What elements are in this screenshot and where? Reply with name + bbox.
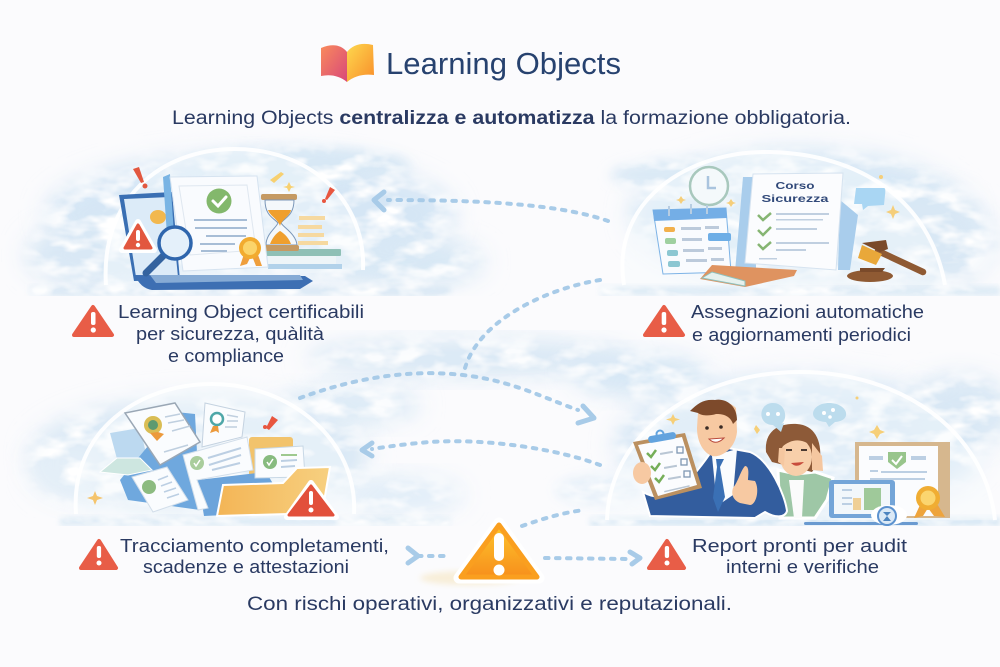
icon: red exclamation left (133, 167, 148, 188)
icon: teal pale document (100, 458, 152, 475)
text block: Learning Object certificabili (118, 301, 364, 322)
icon: document teal seal (202, 403, 245, 447)
subtitle: Learning Objects centralizza e automatizza la formazione obbligatoria. (172, 108, 851, 129)
icon: red exclamation (263, 416, 278, 430)
icon: document lower left (132, 467, 188, 512)
arrow: dotted flows (300, 200, 628, 559)
caption: assegnazioni (645, 301, 924, 345)
icon: document with seal (125, 403, 200, 465)
text block: interni e verifiche (726, 556, 879, 577)
arrow: tracking to report (300, 373, 578, 410)
illustration: manager and colleague (633, 396, 950, 525)
arrow: alert left (418, 554, 450, 558)
domes (76, 149, 995, 520)
caption: report (649, 535, 907, 577)
icon: magnifier (146, 227, 191, 273)
text block: e aggiornamenti periodici (692, 324, 911, 345)
icon: document with check (183, 437, 253, 510)
arrow: report to tracking (372, 441, 600, 465)
icon: warning (81, 541, 116, 568)
glow (420, 571, 520, 585)
icon: course document (745, 173, 843, 270)
icon: speech bubbles (761, 403, 846, 432)
icon: laptop (119, 192, 313, 290)
arrow: certificabili from assegnazioni (388, 200, 608, 221)
text block: Assegnazioni automatiche (691, 301, 924, 322)
text block (691, 301, 924, 345)
label: course name: Sicurezza (762, 193, 829, 205)
text block (118, 301, 364, 366)
icon: orange book (700, 265, 797, 287)
icon: red exclamation right (322, 187, 335, 203)
caption: certificabili (74, 301, 364, 366)
icon: seal (914, 486, 945, 518)
text block: Report pronti per audit (692, 535, 907, 556)
illustration: laptop, certificate and hourglass (119, 167, 342, 290)
blue page stack (198, 472, 290, 516)
text block (120, 535, 389, 577)
icon: red warning (287, 483, 336, 517)
icon: certificate document (163, 174, 268, 271)
panel: clouds top (25, 147, 1000, 296)
icon: clipboard (633, 430, 702, 500)
caption: tracciamento (81, 535, 389, 577)
text block: per sicurezza, quàlità (136, 323, 325, 344)
icon: red warning (122, 222, 154, 250)
icon: certificate frame (855, 442, 950, 518)
icon: book stack (265, 249, 342, 269)
sparkle (87, 491, 103, 505)
sparkles (676, 175, 900, 219)
arrow: alert right (545, 558, 628, 559)
arrow: alert to top right (522, 510, 585, 526)
icon: woman (766, 424, 833, 518)
illustration: folder with documents (87, 403, 336, 517)
icon: small laptop (804, 480, 918, 525)
icon: small hourglass badge (871, 505, 907, 525)
icon: yellow folder front (217, 467, 330, 516)
icon: man (643, 400, 787, 518)
icon: blue page left (110, 428, 150, 470)
icon: seal (239, 237, 262, 266)
closing line: Con rischi operativi, organizzativi e reputazionali. (247, 594, 732, 615)
text block: e compliance (168, 345, 284, 366)
arrow: assegnazioni link downward (465, 280, 600, 368)
icon: warning (645, 307, 683, 335)
icon: blue folder (120, 412, 200, 510)
text block (692, 535, 907, 577)
text block: Tracciamento completamenti, (120, 535, 389, 556)
icon: blue folder behind document (735, 177, 858, 272)
label: course name (762, 180, 829, 205)
heading: Learning Objects: Learning Objects (386, 46, 621, 81)
label: course name: Corso (776, 180, 814, 192)
central warning (420, 523, 539, 585)
orange notes (298, 216, 328, 245)
icon: big warning triangle (459, 523, 539, 578)
panel: clouds bottom (30, 338, 1000, 526)
icon: open book (321, 44, 374, 82)
title: book logo and name (321, 44, 621, 82)
icon: gavel (847, 240, 923, 282)
icon: warning (649, 541, 684, 568)
sparkles (666, 396, 885, 439)
icon: hourglass (261, 194, 299, 251)
icon: warning (74, 307, 112, 335)
arrowheads (362, 192, 640, 564)
icon: document small check (255, 446, 305, 478)
illustration: calendar, course document, gavel (653, 167, 923, 287)
icon: clock (690, 167, 728, 205)
sparkles (270, 172, 295, 192)
icon: yellow folder back (249, 437, 293, 477)
icon: speech bubble (854, 188, 885, 210)
icon: calendar (653, 204, 731, 274)
text block: scadenze e attestazioni (143, 556, 349, 577)
